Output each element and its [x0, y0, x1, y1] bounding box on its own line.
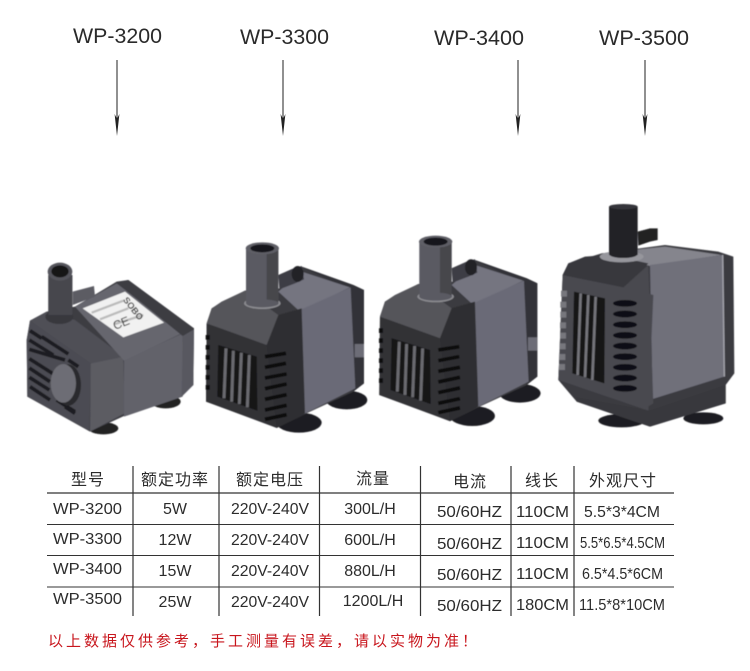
table header row	[71, 465, 657, 492]
table row: WP-3200: 50/60HZ	[437, 504, 502, 521]
table row: WP-3200: 5W	[163, 501, 188, 518]
arrow: WP-3200	[115, 60, 119, 136]
table grid	[47, 466, 674, 616]
table header row: 型号	[71, 466, 105, 490]
pump photo: WP-3500	[558, 204, 734, 427]
pump photo: WP-3400	[379, 236, 541, 426]
model label: WP-3400: WP-3400	[434, 27, 524, 50]
table row: WP-3500: 11.5*8*10CM	[579, 597, 665, 614]
table row: WP-3300: 50/60HZ	[437, 536, 502, 553]
arrow: WP-3500	[643, 60, 647, 136]
table row: WP-3200: WP-3200	[53, 501, 122, 518]
table row: WP-3300: 12W	[159, 532, 192, 549]
table row: WP-3400: 50/60HZ	[437, 567, 502, 584]
table row: WP-3200: 300L/H	[344, 501, 396, 518]
table row: WP-3500	[53, 591, 665, 615]
table row: WP-3400	[53, 561, 663, 584]
CE mark: CE	[111, 314, 132, 333]
table row: WP-3500: 25W	[159, 594, 192, 611]
table header row: 额定电压	[236, 466, 304, 490]
table row: WP-3200: 110CM	[516, 504, 569, 521]
model label: WP-3500: WP-3500	[599, 27, 689, 50]
table row: WP-3500: 1200L/H	[343, 593, 403, 610]
table row: WP-3400: 6.5*4.5*6CM	[582, 566, 663, 583]
table row: WP-3400: 15W	[159, 563, 192, 580]
table row: WP-3500: WP-3500	[53, 591, 122, 608]
table row: WP-3300: 5.5*6.5*4.5CM	[580, 535, 665, 552]
arrow: WP-3400	[516, 60, 520, 136]
table row: WP-3500: 180CM	[516, 597, 569, 614]
arrow: WP-3300	[281, 60, 285, 136]
table row: WP-3300: 600L/H	[344, 532, 396, 549]
pump photo: WP-3300	[206, 242, 367, 433]
table row: WP-3200: 5.5*3*4CM	[584, 504, 660, 521]
table header row: 流量	[356, 465, 390, 489]
table row: WP-3500: 50/60HZ	[437, 598, 502, 615]
model label: WP-3300: WP-3300	[240, 26, 329, 49]
model label: WP-3200: WP-3200	[73, 25, 162, 48]
table row: WP-3300: 110CM	[516, 535, 569, 552]
specification table	[47, 465, 674, 616]
pump photo: WP-3200	[27, 263, 194, 434]
table row: WP-3500: 220V-240V	[231, 594, 309, 611]
table header row: 外观尺寸	[589, 467, 657, 491]
table row: WP-3400: 220V-240V	[231, 563, 309, 580]
table header row: 额定功率	[141, 466, 209, 490]
table row: WP-3400: WP-3400	[53, 561, 122, 578]
table row: WP-3200: 220V-240V	[231, 501, 309, 518]
table row: WP-3400: 880L/H	[344, 563, 396, 580]
brand label text: SOBO	[121, 295, 145, 322]
table row: WP-3300: 220V-240V	[231, 532, 309, 549]
table row: WP-3300	[53, 531, 665, 553]
table row: WP-3300: WP-3300	[53, 531, 122, 548]
red disclaimer note: 以上数据仅供参考，手工测量有误差，请以实物为准！	[48, 633, 480, 650]
table header row: 电流	[453, 468, 487, 492]
table row: WP-3200	[53, 501, 660, 521]
table header row: 线长	[525, 467, 559, 491]
table row: WP-3400: 110CM	[516, 566, 569, 583]
